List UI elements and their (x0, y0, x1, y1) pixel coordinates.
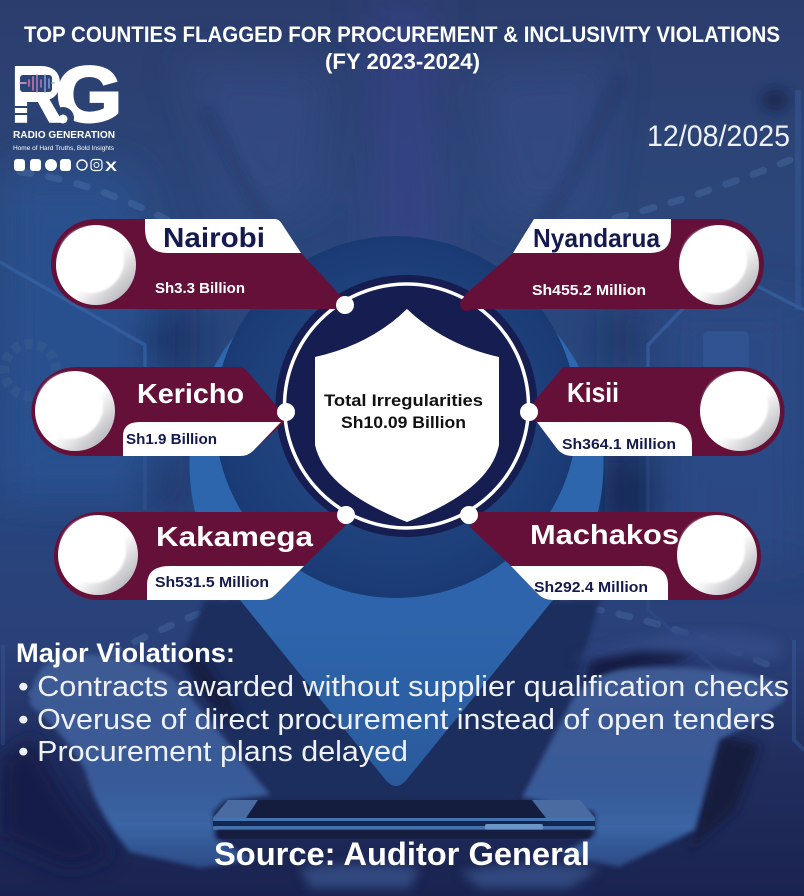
avatar circle (58, 515, 138, 595)
panel: Nairobi: Sh3.3 Billion (155, 280, 245, 297)
panel: Nyandarua: Nyandarua (533, 223, 661, 253)
avatar circle (35, 371, 115, 451)
connector node (277, 403, 295, 421)
panel: Nyandarua: Sh455.2 Million (532, 282, 646, 299)
name tab (513, 219, 671, 253)
source: Source: Auditor General (214, 836, 590, 872)
logo: Radio Generation (11, 50, 122, 174)
connector node (460, 506, 478, 524)
value tab (537, 422, 692, 456)
panel: Machakos (460, 506, 761, 600)
connector node (336, 296, 354, 314)
connector node (460, 297, 474, 311)
avatar circle (700, 371, 780, 451)
list items (18, 671, 789, 768)
value tab (123, 422, 281, 456)
title (24, 22, 780, 74)
panel: Kakamega (54, 506, 355, 600)
avatar circle (56, 225, 136, 305)
total text: Sh10.09 Billion (341, 413, 466, 432)
list heading: Major Violations: (16, 638, 235, 668)
panel: Kisii: Kisii (567, 377, 619, 408)
social media icons: X (105, 158, 118, 174)
location pin and ring behind the diagram (190, 236, 603, 786)
logo: Radio Generation: RADIO GENERATION (13, 129, 115, 141)
panel: Nairobi (51, 219, 354, 314)
logo: Radio Generation: Home of Hard Truths, Bold Insights (13, 145, 115, 152)
panel: Kericho: Sh1.9 Billion (126, 431, 217, 448)
logo soundwave (20, 75, 54, 92)
list items: • Overuse of direct procurement instead of open tenders (18, 704, 775, 736)
list items: • Contracts awarded without supplier qualification checks (18, 671, 789, 703)
panel: Nyandarua (460, 219, 764, 311)
shield (315, 309, 499, 522)
title: (FY 2023-2024) (325, 49, 480, 74)
left hand (0, 654, 420, 888)
connector node (520, 403, 538, 421)
total text: Total Irregularities (324, 391, 483, 410)
avatar circle (677, 515, 757, 595)
central emblem: total irregularities (276, 275, 538, 537)
date: 12/08/2025 (647, 120, 790, 153)
panel: Kisii: Sh364.1 Million (562, 436, 676, 453)
total text (324, 391, 483, 432)
logo: Radio Generation: G (56, 50, 122, 138)
panel: Kericho: Kericho (137, 378, 244, 409)
panel: Kericho (32, 367, 295, 456)
value tab (147, 566, 304, 600)
phone held in the hands (213, 800, 595, 838)
panel: Nairobi: Nairobi (163, 222, 265, 253)
logo: Radio Generation: R (11, 50, 63, 139)
name tab (145, 219, 301, 253)
panel: Machakos: Sh292.4 Million (534, 579, 648, 596)
major violations list (16, 638, 789, 768)
avatar circle (679, 225, 759, 305)
panel: Kakamega: Sh531.5 Million (155, 574, 269, 591)
value tab (511, 566, 668, 600)
panel: Kisii (520, 367, 784, 456)
right hand (460, 631, 785, 888)
dark backdrop behind pin (180, 600, 600, 800)
panel: Kakamega: Kakamega (156, 521, 313, 552)
connector node (337, 506, 355, 524)
panel: Machakos: Machakos (530, 519, 679, 550)
list items: • Procurement plans delayed (18, 736, 408, 768)
